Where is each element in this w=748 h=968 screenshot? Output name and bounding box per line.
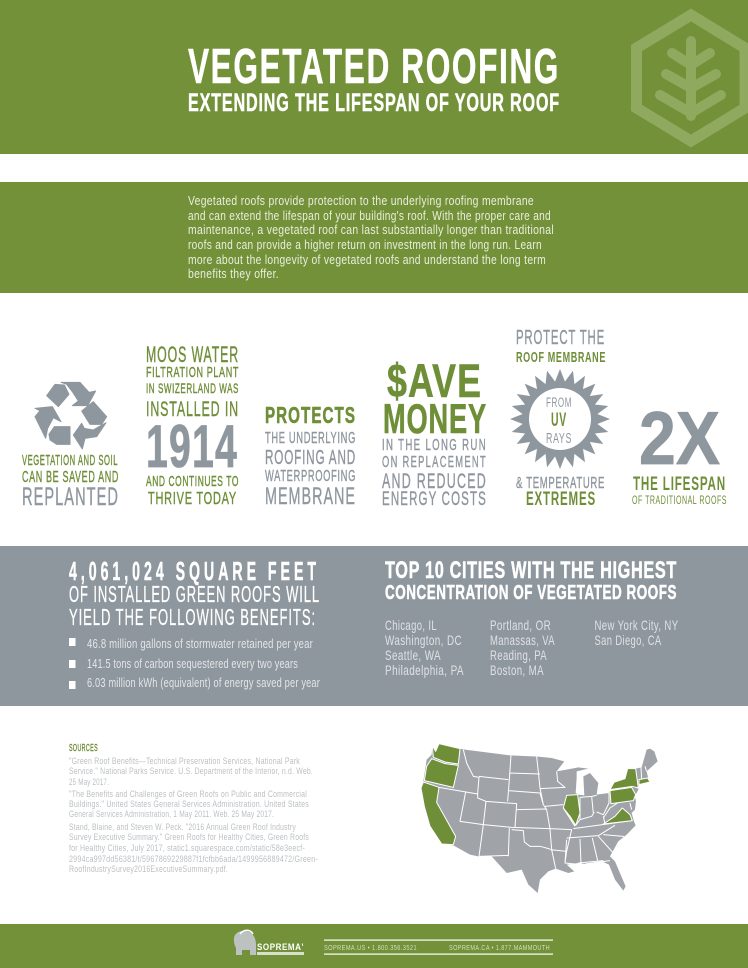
cities heading <box>385 557 677 604</box>
contact line <box>324 940 553 955</box>
sources: 2994ca997dd56381/t/5967869229887f1fcfbb6ada/1499956889472/Green- <box>69 854 318 865</box>
cities list <box>385 617 679 678</box>
cities list: Washington, DC <box>385 632 462 648</box>
panel: UV protection: FROM <box>546 395 572 410</box>
panel: Moos water plant: MOOS WATER <box>146 342 239 367</box>
square feet heading: OF INSTALLED GREEN ROOFS WILL <box>69 581 320 607</box>
sources: Buildings." United States General Services Administration. United States <box>69 799 309 810</box>
sources: "Green Roof Benefits—Technical Preservation Services, National Park <box>69 756 300 767</box>
benefits list <box>69 637 320 690</box>
panel: 2X lifespan: 2X <box>639 396 720 480</box>
sources <box>69 743 318 875</box>
cities list: Portland, OR <box>490 617 551 633</box>
logo: Soprema mammoth <box>234 930 304 955</box>
panel: protects: ROOFING AND <box>265 447 356 469</box>
panel: UV protection: UV <box>551 410 567 431</box>
panel: Moos water plant: INSTALLED IN <box>146 397 239 421</box>
square feet heading: YIELD THE FOLLOWING BENEFITS: <box>69 604 316 630</box>
panel: UV protection: & TEMPERATURE <box>516 475 605 492</box>
header banner <box>0 0 748 154</box>
cities list: Chicago, IL <box>385 617 437 633</box>
cities list: Boston, MA <box>490 662 544 678</box>
panel: Moos water plant: THRIVE TODAY <box>148 488 237 508</box>
sources: General Services Administration, 1 May 2011. Web. 25 May 2017. <box>69 809 274 820</box>
sources: RoofIndustrySurvey2016ExecutiveSummary.pdf. <box>69 864 228 875</box>
panel: protects: MEMBRANE <box>265 483 356 510</box>
panel: replanted: VEGETATION AND SOIL <box>22 453 118 469</box>
panel: replanted <box>22 382 119 511</box>
cities list: Reading, PA <box>490 647 547 663</box>
benefits list: 46.8 million gallons of stormwater retained per year <box>87 637 313 651</box>
benefits list: 141.5 tons of carbon sequestered every two years <box>87 657 298 671</box>
cities list: Manassas, VA <box>490 632 555 648</box>
panel: Moos water plant: IN SWIZERLAND WAS <box>146 381 239 396</box>
contact line: SOPREMA.CA • 1.877.MAMMOUTH <box>449 943 550 952</box>
panel: protects: PROTECTS <box>265 402 356 428</box>
cities list: Seattle, WA <box>385 647 441 663</box>
panel: introduction: maintenance, a vegetated roof can last substantially longer than traditional <box>188 222 554 237</box>
panel: save money <box>382 354 487 510</box>
panel: save money: IN THE LONG RUN <box>382 437 487 454</box>
cities list: New York City, NY <box>594 617 679 633</box>
sources: for Healthy Cities, July 2017, static1.squarespace.com/static/58e3eecf- <box>69 843 305 854</box>
panel: Moos water plant: 1914 <box>146 413 238 480</box>
panel: UV protection: ROOF MEMBRANE <box>516 350 606 366</box>
panel: replanted: REPLANTED <box>22 483 119 511</box>
panel: introduction: benefits they offer. <box>188 266 279 281</box>
panel: introduction <box>0 182 748 293</box>
sources: Service." National Parks Service. U.S. Department of the Interior, n.d. Web. <box>69 766 313 777</box>
panel: save money: AND REDUCED <box>382 470 487 493</box>
panel: Moos water plant <box>146 342 239 508</box>
panel: UV protection: EXTREMES <box>526 489 596 510</box>
panel: UV protection <box>510 326 610 510</box>
panel: introduction: roofs and can provide a higher return on investment in the long run. Learn <box>188 237 542 252</box>
panel: protects <box>265 402 356 510</box>
sources: Stand, Blaine, and Steven W. Peck. "2016 Annual Green Roof Industry <box>69 822 296 833</box>
panel: Moos water plant: FILTRATION PLANT <box>146 365 239 381</box>
benefits list: 6.03 million kWh (equivalent) of energy saved per year <box>87 676 320 690</box>
sources: 25 May 2017. <box>69 777 109 788</box>
panel: save money: MONEY <box>383 395 487 442</box>
subtitle: EXTENDING THE LIFESPAN OF YOUR ROOF <box>188 89 560 117</box>
sources: Survey Executive Summary." Green Roofs for Healthy Cities, Green Roofs <box>69 832 309 843</box>
panel: protects: THE UNDERLYING <box>265 430 356 447</box>
panel: replanted: CAN BE SAVED AND <box>22 469 119 486</box>
sources: SOURCES <box>69 743 98 754</box>
contact line: SOPREMA.US • 1.800.356.3521 <box>324 943 417 952</box>
map: United States <box>421 744 658 893</box>
title: VEGETATED ROOFING <box>188 40 560 94</box>
square feet heading <box>69 556 320 630</box>
icon: recycle <box>35 382 107 449</box>
square feet heading: 4,061,024 SQUARE FEET <box>69 556 320 586</box>
panel: save money: ON REPLACEMENT <box>382 454 487 471</box>
panel: protects: WATERPROOFING <box>265 468 356 485</box>
panel: save money: $AVE <box>387 354 482 407</box>
icon: sun <box>510 369 610 469</box>
sources: "The Benefits and Challenges of Green Roofs on Public and Commercial <box>69 789 307 800</box>
footer <box>0 924 748 968</box>
panel: grey statistics band <box>0 546 748 706</box>
panel: UV protection: PROTECT THE <box>516 326 605 349</box>
icon: hexagon tree <box>636 15 745 141</box>
panel: introduction: and can extend the lifespan of your building's roof. With the proper care and <box>188 208 551 223</box>
panel: Moos water plant: AND CONTINUES TO <box>146 474 239 490</box>
panel: UV protection: RAYS <box>546 431 572 447</box>
panel: 2X lifespan <box>632 396 727 507</box>
logo: Soprema mammoth: SOPREMA' <box>257 942 304 952</box>
panel: introduction: Vegetated roofs provide protection to the underlying roofing membrane <box>188 193 534 208</box>
panel: save money: ENERGY COSTS <box>382 489 487 510</box>
panel: introduction: more about the longevity of vegetated roofs and understand the long term <box>188 252 546 267</box>
highlighted states <box>421 744 650 845</box>
cities list: Philadelphia, PA <box>385 662 464 678</box>
cities list: San Diego, CA <box>594 632 662 648</box>
